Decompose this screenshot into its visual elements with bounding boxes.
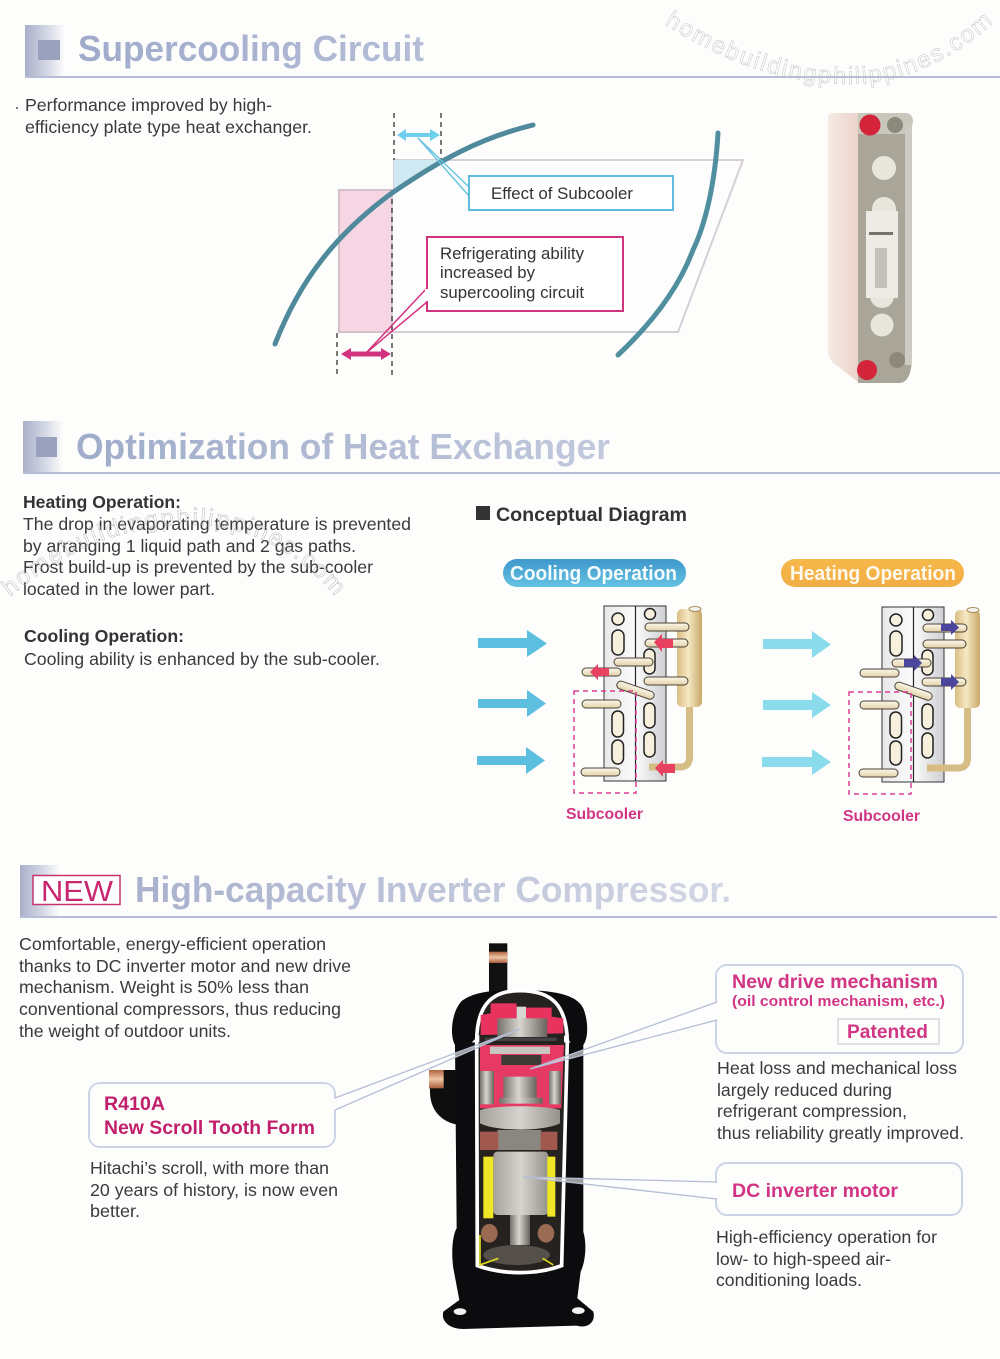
heading: Optimization of Heat Exchanger [23,421,1000,474]
text: cooling operation: Cooling ability is enhanced by the sub-cooler. [24,649,380,669]
text: heating operation: located in the lower part. [23,579,215,599]
heading: NEW High-capacity Inverter Compressor: High-capacity Inverter Compressor. [135,869,731,910]
watermark: top right: homebuildingphilippines.com [665,10,992,88]
callout: refrigerating ability: supercooling circuit [440,284,584,302]
callout: R410A new scroll tooth form [89,1083,337,1147]
badge: cooling operation: Cooling Operation [510,563,677,585]
text: compressor intro: conventional compressors, thus reducing [19,999,341,1019]
diagram: coil paths [581,606,702,781]
text: heating operation: The drop in evaporating temperature is prevented [23,514,411,534]
callout: new drive mechanism: New drive mechanism [732,971,938,993]
callout: subcooler zone: Subcooler [566,806,643,823]
callout: R410A new scroll tooth form: New Scroll Tooth Form [104,1117,315,1139]
text: performance intro: Performance improved by high- [25,95,272,115]
leader lines: callouts to compressor [335,1002,717,1199]
arrow: refrigerating ability span [341,348,391,360]
text: high-efficiency operation: High-efficiency operation for [716,1227,937,1247]
callout: refrigerating ability: Refrigerating ability [440,245,585,263]
heading: NEW High-capacity Inverter Compressor: NEW [41,876,114,908]
text: heat loss: thus reliability greatly improved. [717,1123,964,1143]
section: optimization of heat exchanger [0,421,1000,825]
text: Hitachi scroll: better. [90,1201,140,1221]
text: compressor intro: the weight of outdoor units. [19,1021,231,1041]
section: high-capacity inverter compressor [19,865,997,1329]
watermark: body text: homebuildingphilippines.com [0,508,343,596]
arrows: airflow [762,631,831,775]
callout: subcooler zone [843,692,920,825]
text: heat loss: Heat loss and mechanical loss [717,1058,957,1078]
callout: new drive mechanism: (oil control mechanism, etc.) [732,993,945,1010]
text: high-efficiency operation: conditioning loads. [716,1270,862,1290]
text: heating operation: Heating Operation: [23,492,181,512]
heading: Supercooling Circuit [25,25,1000,78]
callout: subcooler zone [566,691,643,823]
callout: DC inverter motor: DC inverter motor [732,1180,898,1202]
text: Hitachi scroll [90,1158,338,1221]
text: compressor intro [19,934,351,1041]
diagram: cooling operation [477,559,702,823]
section: supercooling circuit [16,25,1000,383]
text: heat loss: largely reduced during [717,1080,892,1100]
callout: effect of subcooler: Effect of Subcooler [491,185,634,203]
arrows: airflow [477,630,547,774]
text: heat loss: refrigerant compression, [717,1101,907,1121]
image: compressor cutaway [429,943,594,1329]
diagram: coil paths [859,607,980,782]
callout: refrigerating ability [366,237,623,353]
diagram: heating operation [762,559,980,825]
heading: Optimization of Heat Exchanger: Optimization of Heat Exchanger [76,426,610,467]
chart: subcooling cycle diagram [275,113,743,378]
text: Hitachi scroll: 20 years of history, is now even [90,1180,338,1200]
text: compressor intro: Comfortable, energy-efficient operation [19,934,326,954]
text: heating operation [23,492,411,599]
text: heating operation: Frost build-up is prevented by the sub-cooler [23,557,373,577]
arrow: subcooler effect span [397,129,440,141]
text: cooling operation [24,626,380,669]
callout: R410A new scroll tooth form: R410A [104,1093,165,1115]
text: performance intro [16,95,312,137]
text: heat loss [717,1058,964,1143]
callout: refrigerating ability: increased by [440,264,536,282]
icon: plate heat exchanger [828,113,913,383]
callout: new drive mechanism [714,965,963,1053]
text: cooling operation: Cooling Operation: [24,626,184,646]
heading: conceptual diagram: Conceptual Diagram [496,504,687,526]
text: high-efficiency operation [716,1227,937,1290]
callout: DC inverter motor [714,1163,962,1215]
text: high-efficiency operation: low- to high-speed air- [716,1249,891,1269]
badge: heating operation: Heating Operation [790,563,956,585]
text: compressor intro: mechanism. Weight is 50% less than [19,977,309,997]
heading: Supercooling Circuit: Supercooling Circuit [78,28,424,69]
text: heating operation: by arranging 1 liquid path and 2 gas paths. [23,536,356,556]
text: Hitachi scroll: Hitachi’s scroll, with more than [90,1158,329,1178]
text: performance intro: efficiency plate type heat exchanger. [25,117,312,137]
callout: effect of subcooler [418,138,673,210]
badge: patented: Patented [847,1021,928,1043]
text: compressor intro: thanks to DC inverter motor and new drive [19,956,351,976]
heading: NEW High-capacity Inverter Compressor [20,865,997,918]
callout: subcooler zone: Subcooler [843,808,920,825]
